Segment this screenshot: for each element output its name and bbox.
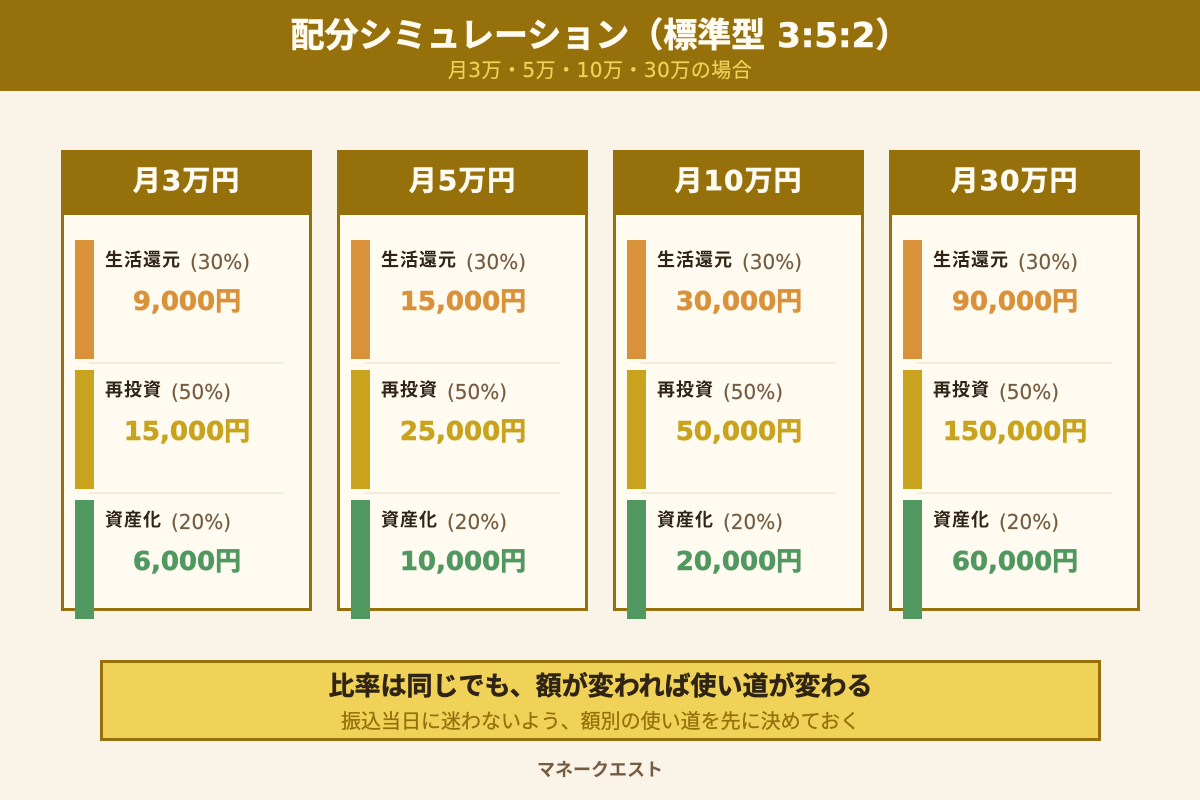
row: 生活還元: 30,000円 [676, 287, 802, 317]
row: 再投資: 再投資 [657, 380, 714, 401]
row: 生活還元: 生活還元 [381, 250, 457, 271]
row: 生活還元: (30%) [742, 250, 802, 274]
row: 再投資: (50%) [723, 380, 783, 404]
row: 資産化: (20%) [723, 510, 783, 534]
row: 生活還元 [627, 240, 802, 359]
row: 再投資 [75, 370, 250, 489]
row: 生活還元: 15,000円 [400, 287, 526, 317]
row: 資産化: 資産化 [933, 510, 990, 531]
row: 再投資: (50%) [447, 380, 507, 404]
row: 資産化: (20%) [999, 510, 1059, 534]
card heading: 月10万円 [675, 164, 802, 197]
row: 資産化 [75, 500, 241, 619]
row: 再投資: (50%) [999, 380, 1059, 404]
row: 再投資: 再投資 [105, 380, 162, 401]
panel: 月5万円 [337, 150, 588, 611]
panel: 月10万円 [613, 150, 864, 611]
row: 生活還元: 生活還元 [105, 250, 181, 271]
card heading [337, 150, 588, 215]
row: 生活還元: (30%) [466, 250, 526, 274]
row: 再投資 [903, 370, 1087, 489]
row: 資産化: 6,000円 [133, 547, 241, 577]
row: 再投資: 再投資 [933, 380, 990, 401]
card heading: 月5万円 [409, 164, 516, 197]
title: 配分シミュレーション（標準型 3:5:2） [291, 16, 909, 56]
row: 再投資: 50,000円 [676, 417, 802, 447]
callout [100, 660, 1101, 741]
row: 資産化: (20%) [447, 510, 507, 534]
row: 資産化 [627, 500, 802, 619]
row: 資産化 [351, 500, 526, 619]
row: 生活還元: 90,000円 [952, 287, 1078, 317]
row: 資産化: (20%) [171, 510, 231, 534]
panel: 月3万円 [61, 150, 312, 611]
row: 生活還元: 生活還元 [933, 250, 1009, 271]
row: 資産化: 資産化 [657, 510, 714, 531]
card heading: 月30万円 [951, 164, 1078, 197]
row: 再投資: 15,000円 [124, 417, 250, 447]
row: 再投資 [351, 370, 526, 489]
row: 資産化: 20,000円 [676, 547, 802, 577]
card heading [889, 150, 1140, 215]
row: 再投資: 再投資 [381, 380, 438, 401]
card heading: 月3万円 [133, 164, 240, 197]
row: 資産化: 60,000円 [952, 547, 1078, 577]
header band [0, 0, 1200, 91]
row: 再投資 [627, 370, 802, 489]
row: 生活還元: 生活還元 [657, 250, 733, 271]
row: 再投資: 150,000円 [943, 417, 1087, 447]
card heading [613, 150, 864, 215]
row: 資産化: 資産化 [105, 510, 162, 531]
row: 生活還元 [903, 240, 1078, 359]
footer credit: マネークエスト [537, 760, 663, 781]
row: 資産化: 10,000円 [400, 547, 526, 577]
subtitle: 月3万・5万・10万・30万の場合 [448, 58, 752, 82]
row: 資産化 [903, 500, 1078, 619]
row: 生活還元: 9,000円 [133, 287, 241, 317]
row: 再投資: (50%) [171, 380, 231, 404]
row: 生活還元: (30%) [1018, 250, 1078, 274]
row: 生活還元 [75, 240, 250, 359]
callout subtext: 振込当日に迷わないよう、額別の使い道を先に決めておく [341, 709, 860, 733]
callout headline: 比率は同じでも、額が変われば使い道が変わる [329, 672, 872, 702]
row: 再投資: 25,000円 [400, 417, 526, 447]
row: 生活還元: (30%) [190, 250, 250, 274]
card heading [61, 150, 312, 215]
panel: 月30万円 [889, 150, 1140, 611]
row: 生活還元 [351, 240, 526, 359]
row: 資産化: 資産化 [381, 510, 438, 531]
